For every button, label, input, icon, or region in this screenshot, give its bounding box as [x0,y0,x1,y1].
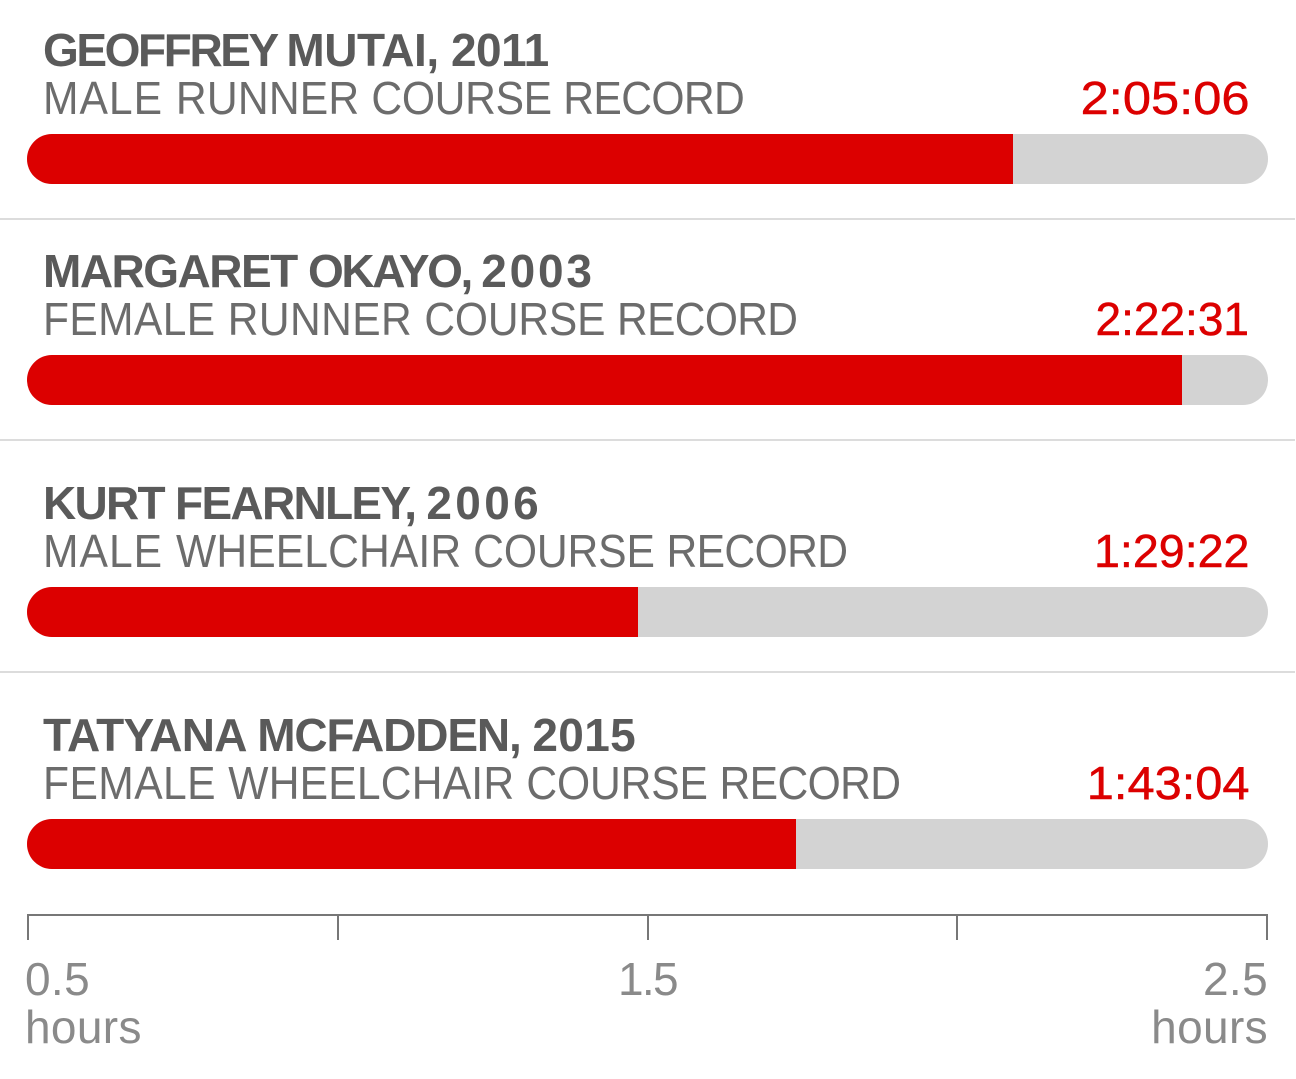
bar [27,134,1268,184]
time: 1:29:22 [1094,525,1249,577]
axis [25,914,1268,1053]
category: FEMALE RUNNER COURSE RECORD [43,293,797,345]
name: GEOFFREY MUTAI, 2011 [43,24,549,76]
name: MARGARET OKAYO, 2003 [43,245,595,297]
axis label: 2.5 hours [1151,953,1268,1053]
category: MALE WHEELCHAIR COURSE RECORD [43,525,847,577]
axis label: 0.5 hours: hours [25,1001,142,1053]
name: TATYANA MCFADDEN, 2015 [43,709,636,761]
row: Tatyana McFadden [27,709,1268,869]
time: 2:05:06 [1080,72,1249,124]
axis label: 1.5: 1.5 [618,953,677,1005]
category: MALE RUNNER COURSE RECORD [43,72,744,124]
bar [27,355,1268,405]
axis label: 0.5 hours [25,953,142,1053]
bar [27,819,1268,869]
bar [27,587,1268,637]
name: KURT FEARNLEY, 2006 [43,477,542,529]
axis label: 2.5 hours: hours [1151,1001,1268,1053]
time: 2:22:31 [1096,293,1249,345]
axis label: 2.5 hours: 2.5 [1203,953,1268,1005]
row: Kurt Fearnley [27,477,1268,637]
row: Geoffrey Mutai [27,24,1268,184]
axis label: 0.5 hours: 0.5 [25,953,90,1005]
category: FEMALE WHEELCHAIR COURSE RECORD [43,757,900,809]
row: Margaret Okayo [27,245,1268,405]
time: 1:43:04 [1086,757,1249,809]
